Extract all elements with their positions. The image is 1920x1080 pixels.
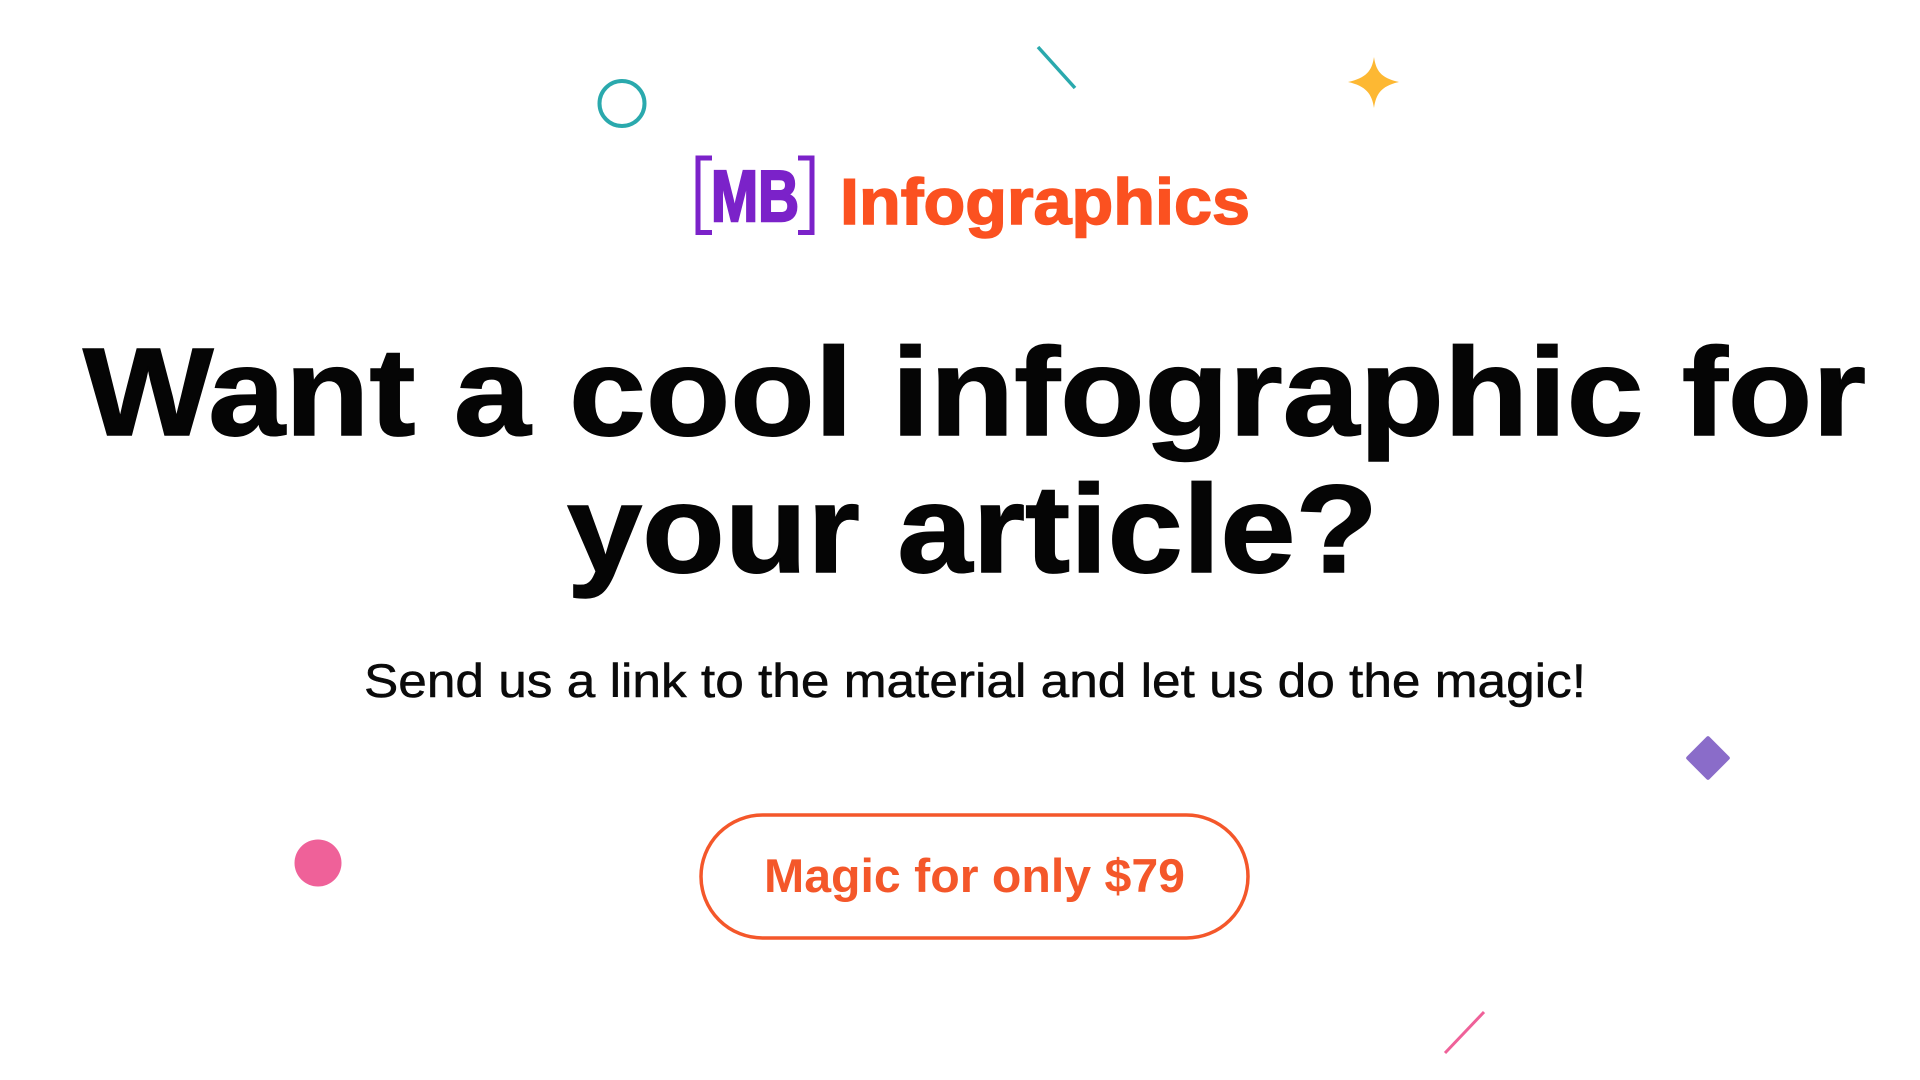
logo wordmark: Infographics: [840, 165, 1250, 238]
decoration: pink dot: [294, 840, 342, 886]
decoration: pink line: [1445, 1012, 1484, 1053]
call-to-action button: [701, 815, 1248, 938]
decoration: yellow star: [1348, 57, 1399, 108]
call-to-action button: Magic for only $79: [764, 849, 1185, 902]
headline: your article?: [567, 460, 1378, 599]
subheading: Send us a link to the material and let us do the magic!: [364, 654, 1586, 707]
decoration: teal line: [1038, 47, 1075, 88]
decoration: purple diamond: [1685, 735, 1731, 781]
headline: [83, 323, 1866, 599]
headline: Want a cool infographic for: [83, 323, 1866, 462]
logo: [698, 157, 1250, 238]
logo mark: MB in brackets: MB: [711, 157, 799, 237]
decoration: teal ring: [600, 81, 644, 126]
